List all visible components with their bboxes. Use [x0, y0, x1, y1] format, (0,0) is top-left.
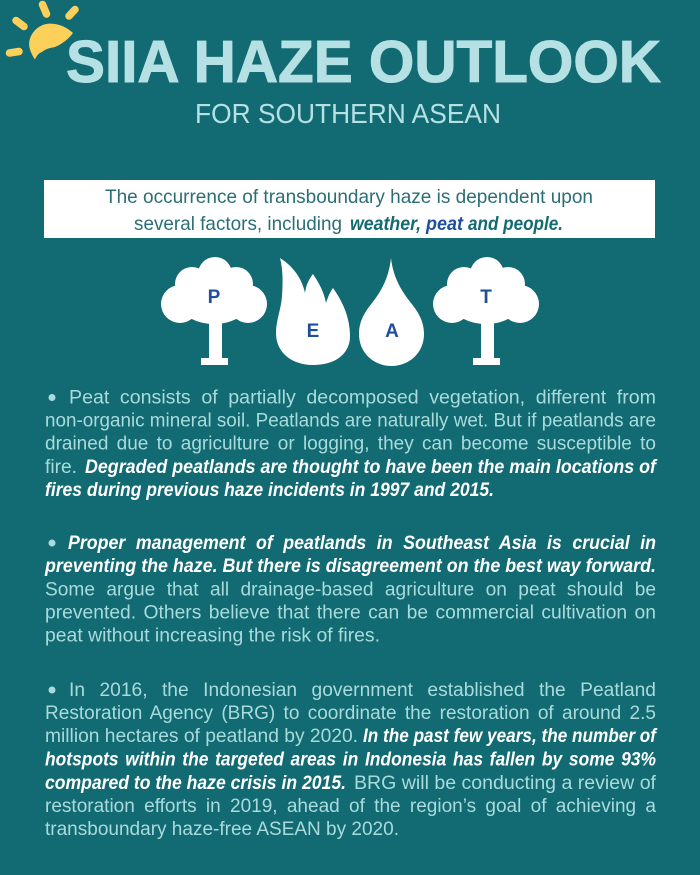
intro line 2: and people. — [468, 213, 563, 235]
text block: paragraph 2: Proper management of peatlands in Southeast Asia is crucial in — [68, 533, 656, 554]
text block: paragraph 3: BRG will be conducting a review of — [354, 773, 657, 794]
text block: paragraph 3: hotspots within the targeted areas in Indonesia has fallen by some 93% — [45, 750, 656, 770]
text block: paragraph 1: fire. — [45, 457, 77, 478]
icon: tree P — [161, 257, 267, 365]
text block: paragraph 3: compared to the haze crisis in 2015. — [45, 773, 346, 794]
intro line 2: several factors, including — [134, 213, 342, 235]
text block: paragraph 2: preventing the haze. But there is disagreement on the best way forward. — [44, 556, 656, 577]
icon: water drop A — [359, 258, 424, 366]
intro line 2: weather, — [350, 213, 421, 235]
text block: paragraph 3: In the past few years, the number of — [363, 726, 658, 747]
icon: tree T: T — [480, 287, 492, 308]
icon: flame E: E — [307, 321, 319, 342]
text block: paragraph 2: prevented. Others believe that there can be commercial cultivation on — [45, 602, 656, 624]
icon: tree P: P — [208, 287, 221, 308]
text block: paragraph 3: transboundary haze-free ASEAN by 2020. — [45, 819, 399, 840]
text block: paragraph 1 — [45, 388, 658, 501]
text block: paragraph 3: restoration efforts in 2019, ahead of the region’s goal of achieving a — [45, 796, 656, 817]
icon: sun — [10, 4, 75, 60]
text block: paragraph 3: Restoration Agency (BRG) to coordinate the restoration of around 2.5 — [45, 703, 656, 724]
intro line 1: The occurrence of transboundary haze is dependent upon — [105, 186, 593, 208]
icon: flame E — [276, 258, 350, 365]
title: SIIA HAZE OUTLOOK — [66, 29, 661, 95]
icon: water drop A: A — [385, 321, 399, 342]
panel: intro banner — [44, 180, 655, 238]
text block: paragraph 1: drained due to agriculture or logging, they can become susceptible to — [45, 434, 656, 454]
subtitle: FOR SOUTHERN ASEAN — [195, 98, 501, 129]
text block: paragraph 1: non-organic mineral soil. Peatlands are naturally wet. But if peatlands are — [45, 410, 656, 432]
text block: paragraph 1: Peat consists of partially decomposed vegetation, different from — [69, 388, 656, 408]
text block: paragraph 3: In 2016, the Indonesian government established the Peatland — [69, 680, 656, 701]
intro line 2 — [134, 213, 563, 235]
intro line 2: peat — [425, 213, 464, 235]
text block: paragraph 2: Some argue that all drainage-based agriculture on peat should be — [45, 580, 656, 600]
text block: paragraph 2: peat without increasing the risk of fires. — [45, 626, 380, 646]
text block: paragraph 2 — [44, 533, 656, 646]
icon: tree T — [433, 257, 539, 365]
text block: paragraph 3: million hectares of peatland by 2020. — [45, 726, 358, 747]
text block: paragraph 1: fires during previous haze incidents in 1997 and 2015. — [45, 480, 494, 501]
text block: paragraph 1: Degraded peatlands are thought to have been the main locations of — [85, 457, 658, 478]
text block: paragraph 3 — [45, 680, 658, 840]
